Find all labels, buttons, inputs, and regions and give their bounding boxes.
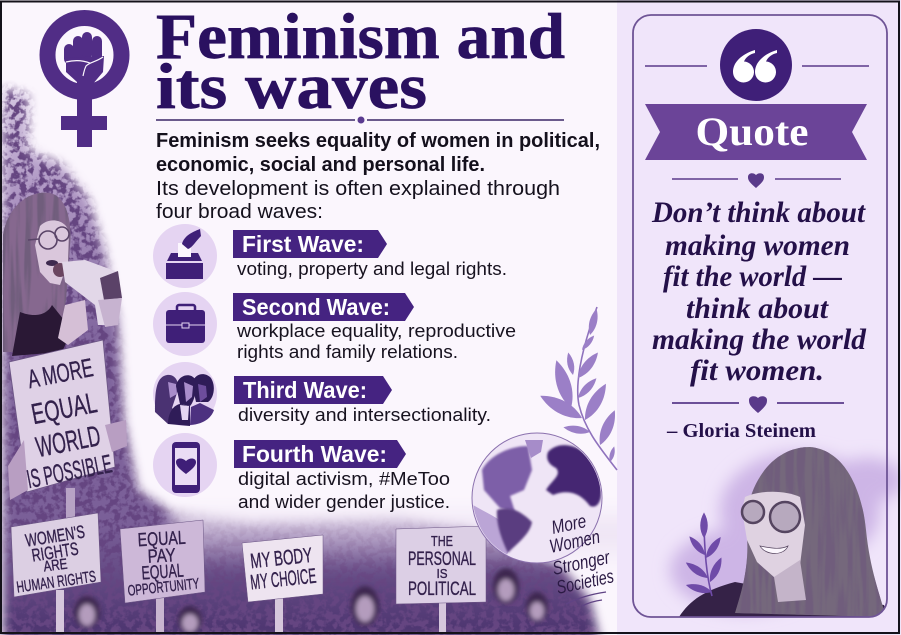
glasses <box>742 501 800 532</box>
glasses <box>28 227 69 249</box>
intro text: economic, social and personal life. <box>156 154 485 176</box>
ribbon: Quote: Quote <box>696 109 808 154</box>
sign: equal pay equal opportunity: EQUAL <box>137 528 186 551</box>
face <box>35 220 69 285</box>
title: its waves <box>156 51 427 123</box>
caption: more women stronger societies <box>548 511 616 606</box>
sign: equal pay equal opportunity <box>120 520 205 632</box>
background: left panel <box>0 0 617 635</box>
sign: the personal is political: IS <box>436 566 448 581</box>
sign: women's rights are human rights: HUMAN RIGHTS <box>16 569 97 597</box>
divider with heart <box>672 396 844 413</box>
quote text: making women <box>665 229 850 262</box>
quote text: fit women. <box>690 354 824 387</box>
quote text: fit the world — <box>663 260 842 293</box>
icon: three women in profile <box>153 362 217 426</box>
intro text: four broad waves: <box>156 201 323 223</box>
sign: equal pay equal opportunity: EQUAL <box>141 561 184 584</box>
sign: the personal is political <box>396 526 486 632</box>
description: third wave: diversity and intersectionality. <box>238 404 491 425</box>
sign: the personal is political: THE <box>431 533 453 550</box>
intro text: Its development is often explained through <box>156 178 560 200</box>
banner: second wave: Second Wave: <box>242 294 390 320</box>
description: second wave <box>236 320 516 362</box>
banner: first wave: First Wave: <box>242 231 364 257</box>
icon: quotation mark badge <box>645 29 869 101</box>
attribution: – Gloria Steinem <box>666 420 816 442</box>
right woman <box>192 374 214 402</box>
illustration: woman with megaphone <box>3 193 122 356</box>
middle woman <box>176 375 196 406</box>
banner: fourth wave: Fourth Wave: <box>242 441 387 467</box>
wave row: third wave <box>153 362 491 426</box>
decoration: olive branch <box>537 307 620 470</box>
hair <box>3 193 70 352</box>
decoration: leaf sprig <box>686 512 722 596</box>
wave row: second wave <box>153 292 516 362</box>
icon: smartphone with heart <box>153 433 217 497</box>
sign: my body my choice: MY CHOICE <box>249 565 317 594</box>
divider with heart <box>672 173 841 188</box>
portrait: Gloria Steinem <box>679 447 888 617</box>
sign: a more equal world is possible: EQUAL <box>29 387 100 431</box>
sign: equal pay equal opportunity: PAY <box>147 545 176 568</box>
title divider <box>156 116 564 124</box>
face <box>742 492 805 578</box>
dark floral top <box>679 582 888 617</box>
dark top <box>12 305 72 356</box>
sign: women's rights are human rights: RIGHTS <box>30 539 80 566</box>
illustration: protest crowd <box>0 80 642 635</box>
sign: the personal is political: PERSONAL <box>408 549 476 570</box>
description: second wave: rights and family relations. <box>237 341 458 362</box>
mouth <box>46 260 58 266</box>
hand <box>58 300 88 345</box>
sign: a more equal world is possible: WORLD <box>33 420 103 464</box>
ribbon: Quote <box>645 104 867 160</box>
sign: my body my choice: MY BODY <box>249 544 313 573</box>
icon: briefcase <box>153 292 217 356</box>
icon: ballot box <box>153 224 217 288</box>
caption: more women stronger societies: More <box>550 511 588 539</box>
wave row: fourth wave <box>153 433 450 512</box>
smile <box>760 546 788 554</box>
caption: more women stronger societies: Stronger <box>551 547 612 580</box>
background: right panel <box>617 0 901 635</box>
description: fourth wave: digital activism, #MeToo <box>238 468 450 489</box>
sign: a more equal world is possible <box>8 340 127 533</box>
sign: a more equal world is possible: IS POSSIBLE <box>24 448 114 494</box>
sign: women's rights are human rights <box>11 513 101 632</box>
megaphone <box>53 260 122 327</box>
description: first wave: voting, property and legal rights. <box>237 258 507 279</box>
hair <box>735 447 886 617</box>
neck <box>774 560 806 602</box>
caption: more women stronger societies: Women <box>548 527 602 558</box>
watercolor wash behind portrait <box>670 452 901 612</box>
sign: women's rights are human rights: WOMEN'S <box>24 522 86 551</box>
illustration: globe <box>472 433 602 563</box>
quote text <box>651 196 867 387</box>
wave row: first wave <box>153 224 507 288</box>
description: second wave: workplace equality, reproductive <box>236 320 516 341</box>
caption: more women stronger societies: Societies <box>555 566 616 599</box>
intro text <box>156 130 600 223</box>
title <box>156 1 565 123</box>
sign: the personal is political: POLITICAL <box>408 579 476 600</box>
title: Feminism and <box>156 1 565 73</box>
panel: quote card <box>633 15 901 617</box>
sign: women's rights are human rights: ARE <box>43 556 68 575</box>
icon: raised fist <box>64 32 104 94</box>
sign: equal pay equal opportunity: OPPORTUNITY <box>127 575 200 600</box>
description: fourth wave <box>238 468 450 512</box>
quote text: making the world <box>652 323 867 356</box>
sign: a more equal world is possible: A MORE <box>25 352 96 394</box>
quote text: think about <box>686 292 830 325</box>
banner: third wave: Third Wave: <box>243 377 367 403</box>
crowd faces <box>74 568 548 634</box>
quote text: Don’t think about <box>651 196 867 229</box>
intro text: Feminism seeks equality of women in political, <box>156 130 600 152</box>
description: fourth wave: and wider gender justice. <box>238 491 450 512</box>
sign: my body my choice <box>242 535 323 632</box>
left woman <box>155 375 178 424</box>
icon: feminism symbol with fist <box>48 18 122 147</box>
